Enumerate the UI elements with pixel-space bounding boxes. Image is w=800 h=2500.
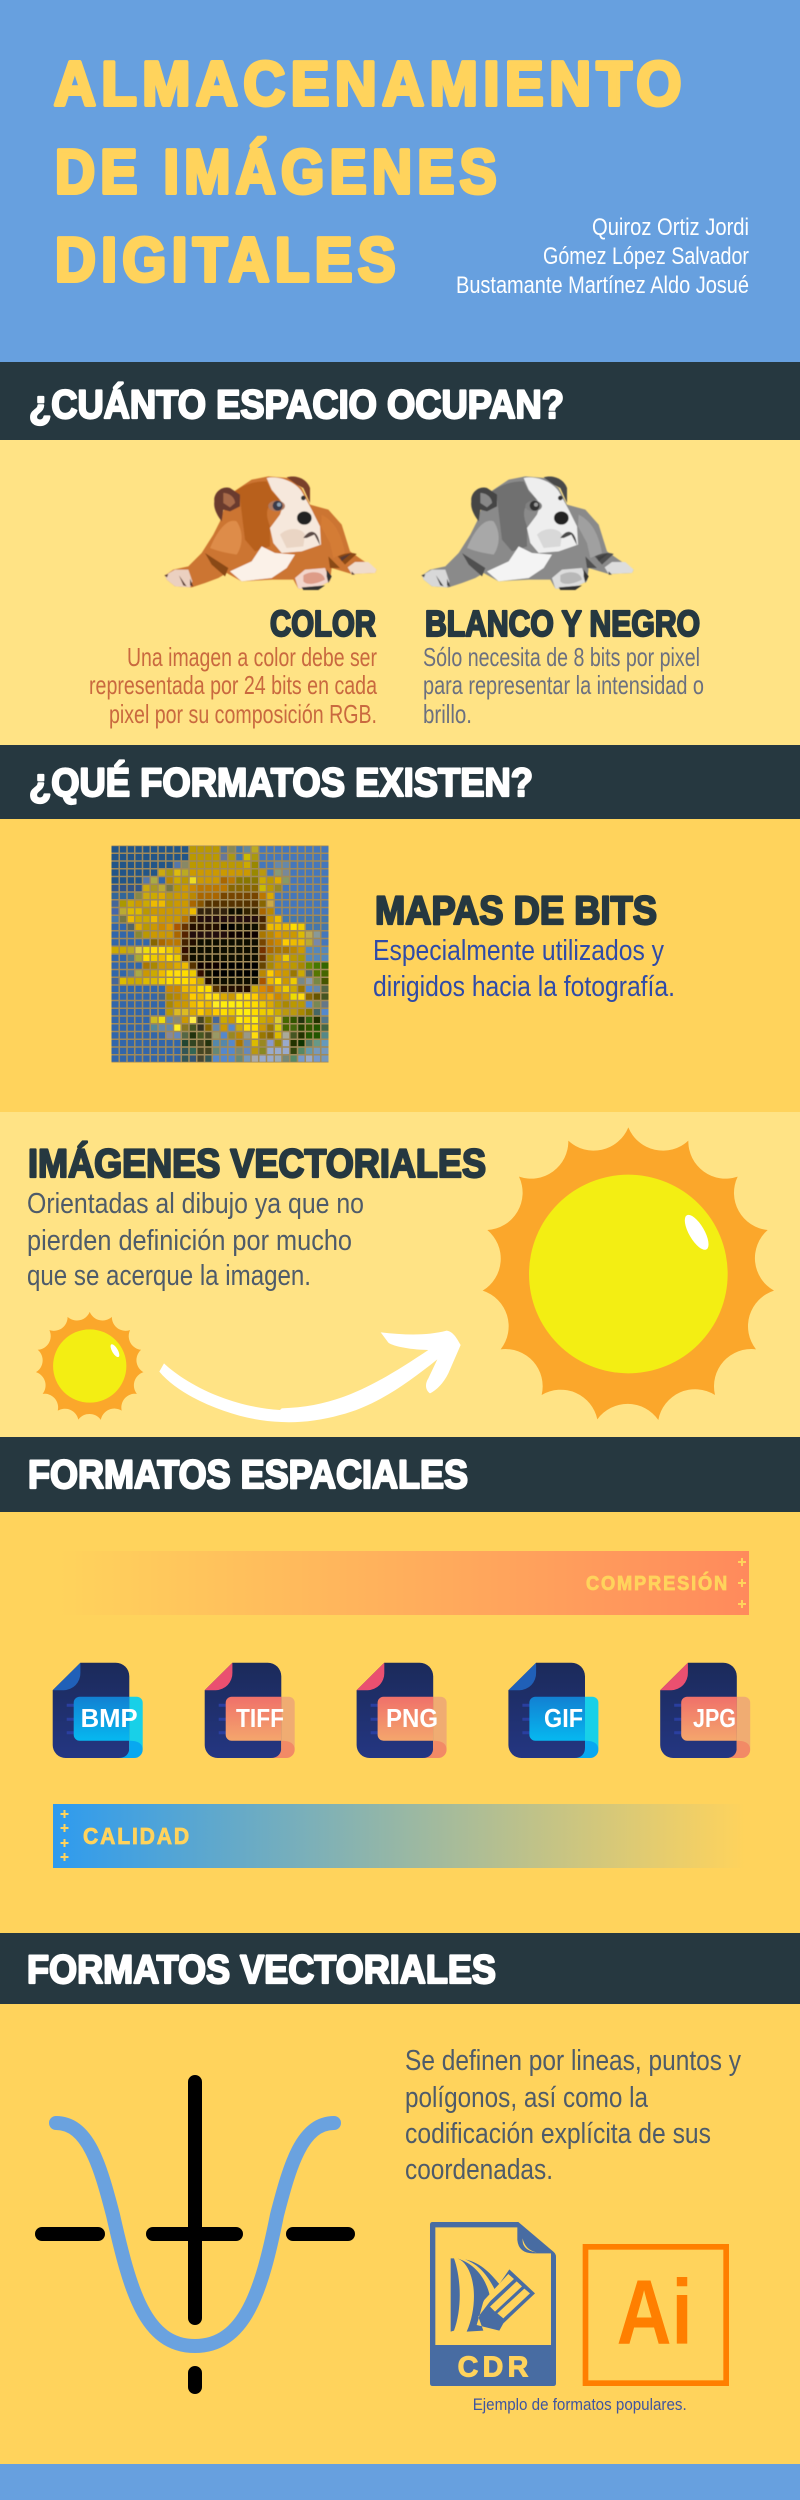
icon: CDR file: CDR (458, 2352, 529, 2384)
heading: blanco y negro: BLANCO Y NEGRO (425, 603, 700, 644)
heading band: formatos vectoriales: FORMATOS VECTORIALES (27, 1948, 496, 1992)
text: black and white description (423, 642, 704, 729)
title (54, 50, 687, 295)
text: mapas de bits description: Especialmente utilizados y (373, 935, 664, 967)
text: black and white description: Sólo necesita de 8 bits por pixel (423, 642, 700, 672)
heading: imágenes vectoriales: IMÁGENES VECTORIALES (28, 1141, 486, 1186)
heading band: qué formatos existen (0, 745, 800, 819)
text: vector formats description: polígonos, así como la (405, 2082, 649, 2114)
panel: imágenes vectoriales (0, 1112, 800, 1437)
icon: TIFF file (205, 1663, 295, 1758)
icon: large sun (483, 1127, 774, 1420)
title: ALMACENAMIENTO (54, 50, 687, 119)
caption: Ejemplo de formatos populares. (473, 2395, 687, 2414)
heading band: cuánto espacio ocupan (0, 362, 800, 440)
text: vector description: pierden definición por mucho (27, 1225, 352, 1257)
icon: BMP file: BMP (81, 1703, 138, 1733)
icon: JPG file (660, 1663, 750, 1758)
icon: GIF file (508, 1663, 598, 1758)
panel: formatos vectoriales (0, 2004, 800, 2464)
icon: GIF file: GIF (544, 1703, 583, 1733)
arrow (159, 1331, 461, 1422)
text: vector formats description: coordenadas. (405, 2154, 553, 2186)
panel: color vs blanco y negro (0, 440, 800, 745)
icon: Adobe Illustrator (585, 2247, 726, 2383)
icon: small sun (36, 1312, 143, 1420)
text: black and white description: brillo. (423, 699, 472, 729)
heading band: formatos espaciales: FORMATOS ESPACIALES (28, 1453, 468, 1497)
image: sunflower pixel mosaic (112, 846, 328, 1062)
text: vector formats description: codificación explícita de sus (405, 2118, 711, 2150)
authors: Gómez López Salvador (543, 243, 749, 270)
text: mapas de bits description: dirigidos hacia la fotografía. (373, 971, 675, 1003)
icon: JPG file: JPG (693, 1703, 736, 1733)
heading: mapas de bits: MAPAS DE BITS (375, 889, 657, 933)
text: color description: Una imagen a color debe ser (127, 642, 377, 672)
heading band: formatos vectoriales (0, 1933, 800, 2004)
chart: curve on axes (42, 2082, 348, 2387)
footer band (0, 2464, 800, 2500)
image: black and white dog (421, 476, 634, 590)
text: black and white description: para representar la intensidad o (423, 670, 704, 700)
bar: compresión (60, 1551, 749, 1615)
title: DIGITALES (55, 226, 401, 295)
header panel (0, 0, 800, 362)
title: DE IMÁGENES (55, 138, 502, 207)
heading: color: COLOR (270, 603, 376, 644)
bar: calidad (53, 1804, 745, 1868)
image: color dog (164, 476, 377, 590)
bar: compresión: COMPRESIÓN (586, 1571, 729, 1595)
heading band: formatos espaciales (0, 1437, 800, 1512)
heading band: cuánto espacio ocupan: ¿CUÁNTO ESPACIO OCUPAN? (29, 382, 564, 427)
heading band: qué formatos existen: ¿QUÉ FORMATOS EXISTEN? (29, 760, 533, 805)
text: mapas de bits description (373, 935, 675, 1003)
bar: calidad: CALIDAD (83, 1823, 191, 1849)
icon: BMP file (53, 1663, 143, 1758)
icon: PNG file (357, 1663, 447, 1758)
text: vector description: Orientadas al dibujo ya que no (27, 1188, 364, 1220)
text: vector formats description (405, 2045, 741, 2186)
text: color description (89, 642, 377, 729)
authors: Quiroz Ortiz Jordi (592, 214, 749, 241)
text: vector description (27, 1188, 364, 1292)
text: vector description: que se acerque la imagen. (27, 1260, 311, 1292)
icon: Adobe Illustrator: Ai (617, 2259, 693, 2363)
icon: PNG file: PNG (386, 1703, 438, 1733)
text: color description: pixel por su composición RGB. (109, 699, 377, 729)
authors: Bustamante Martínez Aldo Josué (456, 272, 749, 299)
panel: formatos espaciales (0, 1512, 800, 1933)
icon: TIFF file: TIFF (236, 1703, 284, 1733)
panel: mapas de bits (0, 819, 800, 1112)
icon: CDR file (430, 2222, 556, 2386)
text: color description: representada por 24 bits en cada (89, 670, 377, 700)
text: vector formats description: Se definen por lineas, puntos y (405, 2045, 741, 2077)
authors (456, 214, 749, 299)
